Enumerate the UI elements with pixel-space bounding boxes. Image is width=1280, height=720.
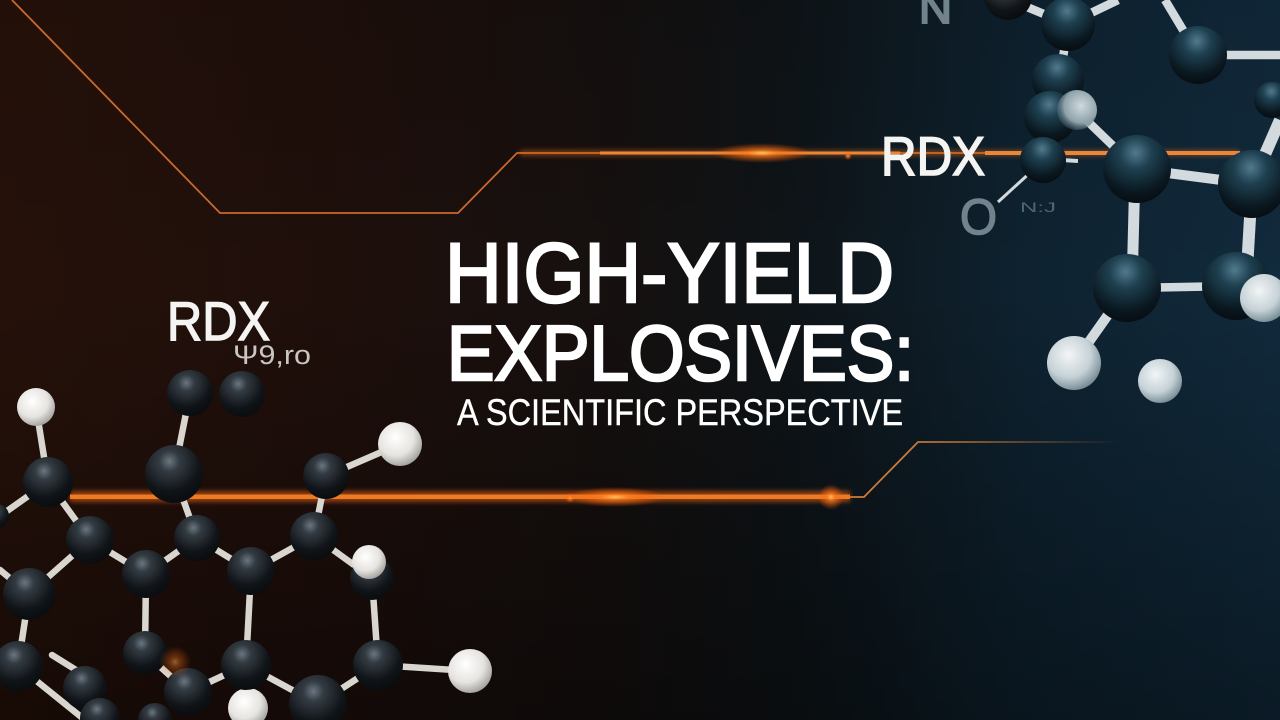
circuit line: middle: [70, 442, 1120, 497]
label: O: O: [960, 189, 997, 245]
label: RDX top right: RDX: [881, 125, 985, 187]
circuit line: top left: [12, 0, 1240, 213]
subtitle: A SCIENTIFIC PERSPECTIVE: [457, 392, 903, 433]
molecule: lower left: [0, 370, 492, 720]
title: [445, 226, 914, 433]
title line 1: HIGH-YIELD: [445, 226, 894, 320]
bonds: [0, 393, 470, 720]
atoms: [17, 388, 55, 426]
label: RDX lower left: RDX: [167, 290, 270, 352]
molecule: upper right: [984, 0, 1280, 403]
atoms: [984, 0, 1032, 20]
title line 2: EXPLOSIVES:: [447, 309, 914, 397]
label: small formula: Ψ9,ro: [233, 340, 311, 370]
glow: middle line: [70, 484, 850, 510]
label: faint formula: N:J: [1020, 199, 1056, 215]
bonds: [998, 0, 1280, 363]
glow: top line: [520, 143, 1240, 163]
